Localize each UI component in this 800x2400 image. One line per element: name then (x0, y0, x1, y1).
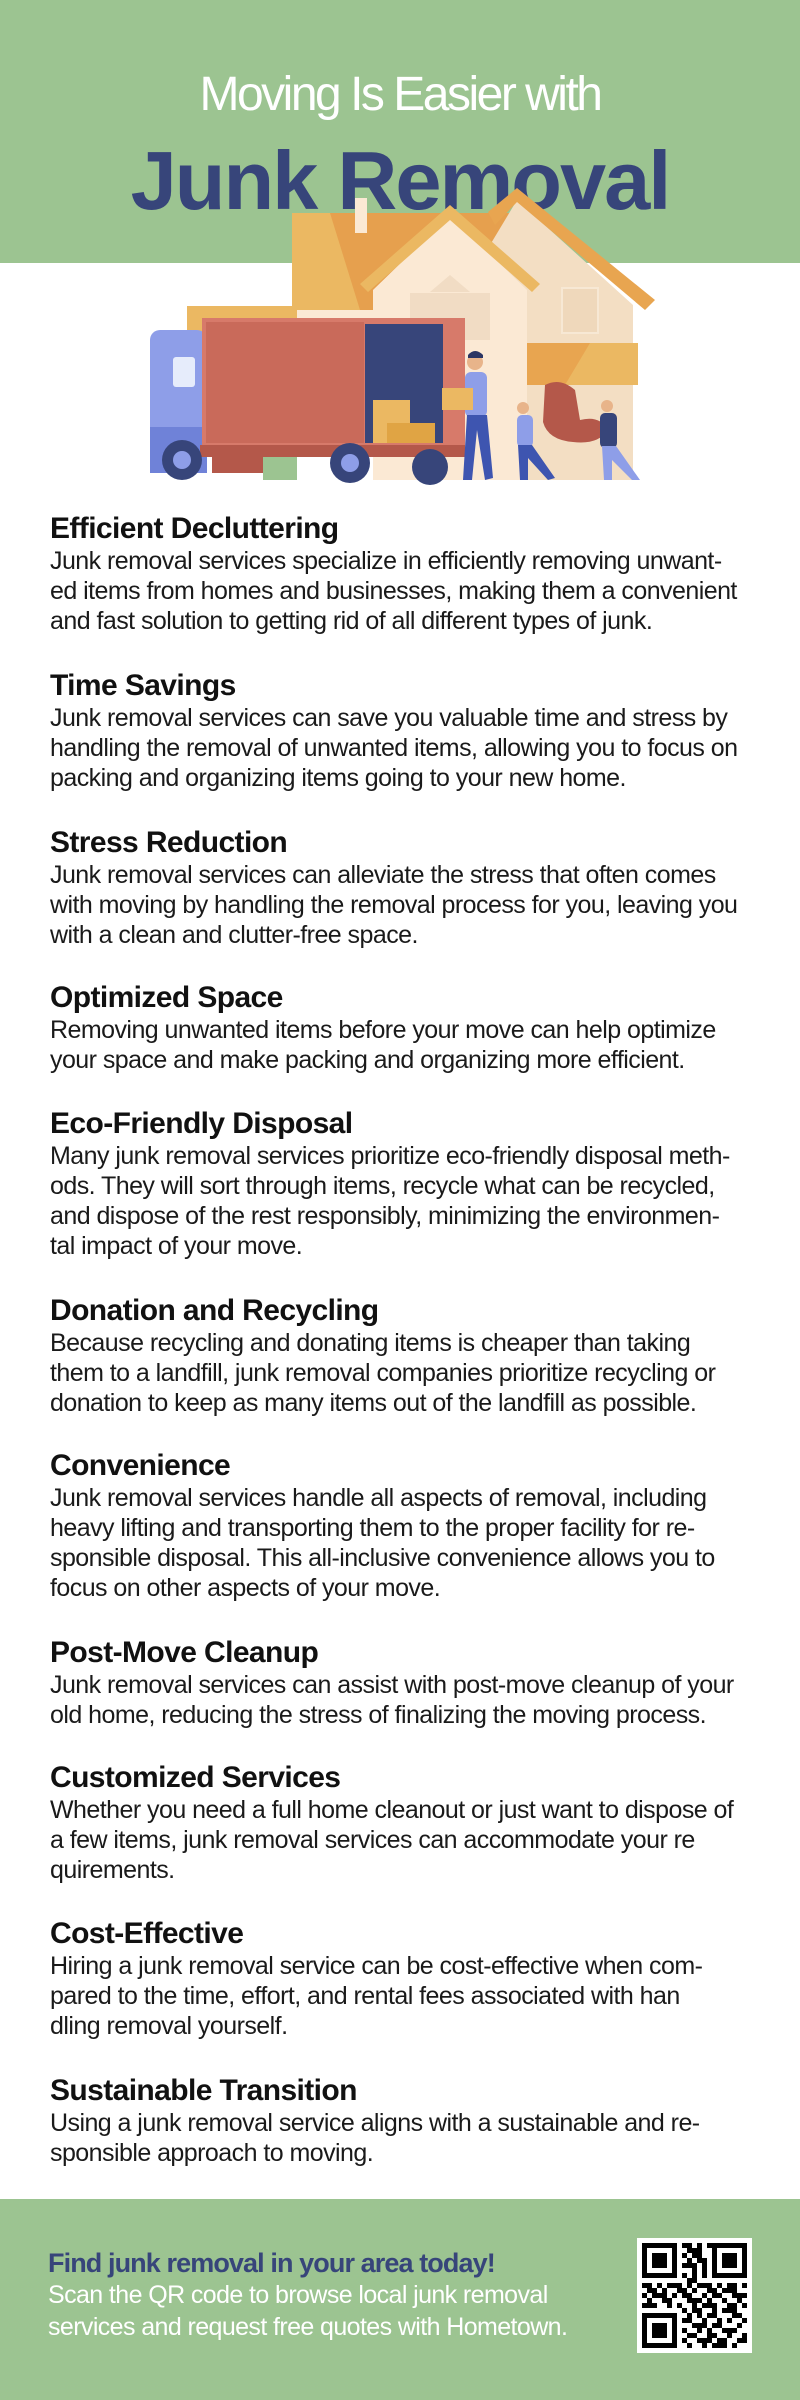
QR code (637, 2238, 752, 2353)
section: Convenience: Junk removal services handle all aspects of removal, including (50, 1484, 707, 1512)
section: Stress Reduction: with moving by handling the removal process for you, leaving you (50, 891, 737, 919)
mover with box (442, 351, 493, 480)
section: Post-Move Cleanup: old home, reducing the stress of finalizing the moving process. (50, 1701, 706, 1729)
section: Eco-Friendly Disposal: and dispose of the rest responsibly, minimizing the environmen- (50, 1202, 719, 1230)
section: Donation and Recycling: donation to keep as many items out of the landfill as possible. (50, 1389, 696, 1417)
section: Convenience: Convenience (50, 1449, 230, 1482)
section: Sustainable Transition: sponsible approach to moving. (50, 2139, 373, 2167)
section: Customized Services: quirements. (50, 1856, 175, 1884)
section: Customized Services: a few items, junk removal services can accommodate your re (50, 1826, 695, 1854)
section: Sustainable Transition: Sustainable Transition (50, 2074, 357, 2107)
title line 1: Moving Is Easier with (200, 68, 600, 121)
section: Optimized Space: Optimized Space (50, 981, 283, 1014)
section: Eco-Friendly Disposal: ods. They will sort through items, recycle what can be recycled, (50, 1172, 715, 1200)
header band (0, 0, 800, 263)
section: Eco-Friendly Disposal: Many junk removal services prioritize eco-friendly disposal meth- (50, 1142, 730, 1170)
yellow box behind truck (187, 306, 297, 334)
section: Eco-Friendly Disposal (50, 1107, 730, 1260)
section: Efficient Decluttering: and fast solution to getting rid of all different types of junk. (50, 607, 652, 635)
section: Donation and Recycling: Because recycling and donating items is cheaper than taking (50, 1329, 690, 1357)
section: Optimized Space: Removing unwanted items before your move can help optimize (50, 1016, 716, 1044)
section: Time Savings: Time Savings (50, 669, 236, 702)
section: Cost-Effective: pared to the time, effort, and rental fees associated with han (50, 1982, 680, 2010)
section: Convenience: heavy lifting and transporting them to the proper facility for re- (50, 1514, 695, 1542)
section: Time Savings: Junk removal services can save you valuable time and stress by (50, 704, 727, 732)
section: Stress Reduction (50, 826, 737, 949)
footer heading: Find junk removal in your area today! (48, 2248, 495, 2278)
chair and two movers (517, 382, 640, 480)
section: Donation and Recycling: Donation and Recycling (50, 1294, 379, 1327)
section: Donation and Recycling: them to a landfill, junk removal companies prioritize recycling or (50, 1359, 715, 1387)
section: Convenience: focus on other aspects of your move. (50, 1574, 440, 1602)
section: Post-Move Cleanup: Junk removal services can assist with post-move cleanup of your (50, 1671, 734, 1699)
section: Post-Move Cleanup (50, 1636, 734, 1729)
section: Customized Services (50, 1761, 734, 1884)
section: Customized Services: Customized Services (50, 1761, 340, 1794)
section: Optimized Space (50, 981, 716, 1074)
section: Eco-Friendly Disposal: Eco-Friendly Disposal (50, 1107, 352, 1140)
section: Time Savings: packing and organizing items going to your new home. (50, 764, 626, 792)
section: Cost-Effective: dling removal yourself. (50, 2012, 287, 2040)
section: Eco-Friendly Disposal: tal impact of your move. (50, 1232, 302, 1260)
section: Efficient Decluttering: ed items from homes and businesses, making them a convenient (50, 577, 737, 605)
section: Efficient Decluttering: Junk removal services specialize in efficiently removing unwant- (50, 547, 722, 575)
section: Time Savings (50, 669, 737, 792)
section: Donation and Recycling (50, 1294, 716, 1417)
section: Convenience (50, 1449, 715, 1602)
footer band (0, 2199, 800, 2400)
section: Optimized Space: your space and make packing and organizing more efficient. (50, 1046, 685, 1074)
truck (150, 318, 465, 485)
back house roof (292, 198, 527, 335)
section: Stress Reduction: Junk removal services can alleviate the stress that often comes (50, 861, 716, 889)
middle house (360, 205, 540, 480)
section: Convenience: sponsible disposal. This all-inclusive convenience allows you to (50, 1544, 715, 1572)
section: Stress Reduction: with a clean and clutter-free space. (50, 921, 418, 949)
illustration: moving truck and houses (150, 188, 655, 485)
section: Efficient Decluttering (50, 512, 738, 635)
footer text: Scan the QR code to browse local junk removal (48, 2281, 548, 2309)
section: Stress Reduction: Stress Reduction (50, 826, 287, 859)
section: Efficient Decluttering: Efficient Decluttering (50, 512, 338, 545)
section: Cost-Effective: Cost-Effective (50, 1917, 243, 1950)
title line 2: Junk Removal (131, 134, 669, 227)
section: Cost-Effective (50, 1917, 702, 2040)
section: Sustainable Transition (50, 2074, 700, 2167)
footer text (48, 2281, 567, 2341)
section: Sustainable Transition: Using a junk removal service aligns with a sustainable and re- (50, 2109, 700, 2137)
section: Post-Move Cleanup: Post-Move Cleanup (50, 1636, 318, 1669)
section: Time Savings: handling the removal of unwanted items, allowing you to focus on (50, 734, 737, 762)
section: Customized Services: Whether you need a full home cleanout or just want to dispose of (50, 1796, 733, 1824)
section: Cost-Effective: Hiring a junk removal service can be cost-effective when com- (50, 1952, 702, 1980)
footer text: services and request free quotes with Hometown. (48, 2313, 567, 2341)
right house (487, 188, 655, 480)
